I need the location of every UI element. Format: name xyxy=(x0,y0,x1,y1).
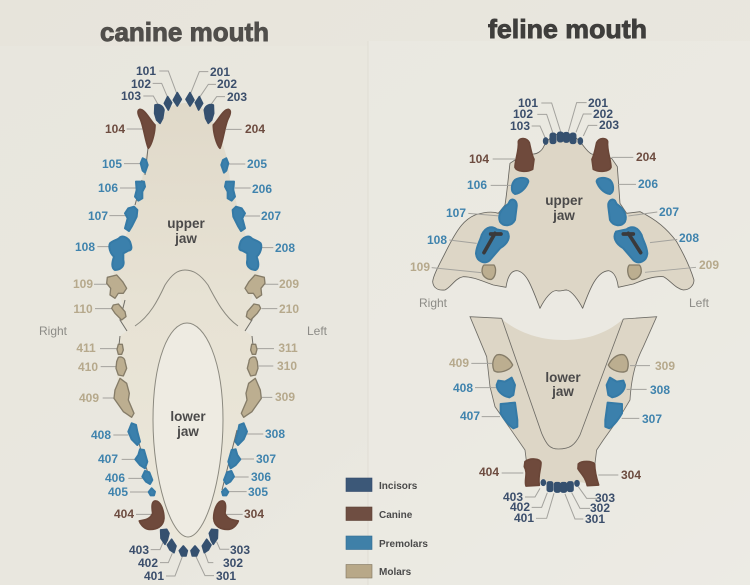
feline upper tooth numbers: 209 xyxy=(699,258,719,272)
canine tooth numbers: 406 xyxy=(105,471,125,485)
canine tooth numbers xyxy=(73,64,299,583)
legend: molars: Molars xyxy=(379,567,412,578)
canine lower teeth xyxy=(100,344,274,576)
canine tooth numbers: 209 xyxy=(279,277,299,291)
feline upper tooth numbers: 108 xyxy=(427,233,447,247)
canine tooth numbers: 108 xyxy=(75,240,95,254)
incisors upper xyxy=(155,93,214,123)
leader lines feline upper xyxy=(432,103,696,273)
feline lower tooth numbers xyxy=(449,356,675,526)
canine tooth numbers: 305 xyxy=(248,485,268,499)
canine tooth numbers: 204 xyxy=(245,122,265,136)
label: canine left side: Left xyxy=(307,324,328,338)
feline lower tooth numbers: 304 xyxy=(621,468,641,482)
molars upper xyxy=(107,275,265,320)
feline upper tooth numbers xyxy=(410,96,719,274)
feline upper tooth numbers: 104 xyxy=(469,152,489,166)
label: canine lower jaw: lower xyxy=(170,409,206,424)
legend xyxy=(346,478,428,578)
canine tooth numbers: 404 xyxy=(114,507,134,521)
feline upper incisors xyxy=(544,132,582,144)
canine tooth numbers: 402 xyxy=(138,556,158,570)
premolars upper xyxy=(109,158,261,270)
feline lower tooth numbers: 401 xyxy=(514,511,534,525)
feline upper tooth numbers: 202 xyxy=(593,107,613,121)
canine tooth numbers: 408 xyxy=(91,428,111,442)
label: canine right side: Right xyxy=(39,324,68,338)
canine tooth numbers: 102 xyxy=(131,77,151,91)
canine tooth numbers: 105 xyxy=(102,157,122,171)
feline lower tooth numbers: 307 xyxy=(642,412,662,426)
premolars lower xyxy=(128,423,247,495)
feline upper jaw shape xyxy=(433,133,694,308)
canine tooth numbers: 409 xyxy=(79,391,99,405)
leader lines lower xyxy=(100,349,274,576)
feline upper tooth numbers: 101 xyxy=(518,96,538,110)
feline lower tooth numbers: 301 xyxy=(585,512,605,526)
canine tooth numbers: 107 xyxy=(88,209,108,223)
label: canine lower jaw: jaw xyxy=(176,424,199,439)
canine tooth numbers: 307 xyxy=(256,452,276,466)
canine tooth numbers: 407 xyxy=(98,452,118,466)
canine tooth numbers: 202 xyxy=(217,77,237,91)
canine tooth numbers: 207 xyxy=(261,209,281,223)
canine tooth numbers: 303 xyxy=(230,543,250,557)
feline lower tooth numbers: 309 xyxy=(655,359,675,373)
canine tooth numbers: 310 xyxy=(277,359,297,373)
feline lower tooth numbers: 402 xyxy=(510,500,530,514)
canine tooth numbers: 306 xyxy=(251,470,271,484)
canine tooth numbers: 410 xyxy=(78,360,98,374)
feline lower tooth numbers: 407 xyxy=(460,409,480,423)
canine jaw shape xyxy=(113,103,259,549)
canine palate arch xyxy=(135,270,238,326)
canine tooth numbers: 203 xyxy=(227,90,247,104)
label: feline lower jaw: jaw xyxy=(551,384,574,399)
label: feline lower jaw: lower xyxy=(545,370,581,385)
canine tooth numbers: 205 xyxy=(247,157,267,171)
feline lower tooth numbers: 408 xyxy=(453,381,473,395)
canine jaw edge lines xyxy=(119,148,254,490)
canine tooth numbers: 206 xyxy=(252,182,272,196)
leader lines upper xyxy=(94,71,278,309)
label: canine upper jaw: upper xyxy=(167,216,205,231)
canine tooth numbers: 401 xyxy=(144,569,164,583)
feline upper tooth numbers: 107 xyxy=(446,206,466,220)
canine tooth numbers: 101 xyxy=(136,64,156,78)
label: canine upper jaw: jaw xyxy=(174,231,197,246)
feline upper tooth numbers: 206 xyxy=(638,177,658,191)
canine upper teeth xyxy=(94,71,278,320)
canine tooth numbers: 106 xyxy=(98,181,118,195)
feline upper molars xyxy=(482,265,641,279)
canine tooth numbers: 208 xyxy=(275,241,295,255)
molars lower xyxy=(114,344,261,417)
canine lower jaw inner oval xyxy=(153,323,223,537)
canine tooth numbers: 109 xyxy=(73,277,93,291)
feline upper tooth numbers: 201 xyxy=(588,96,608,110)
legend: incisors: Incisors xyxy=(379,481,418,492)
leader lines feline lower xyxy=(471,363,650,519)
title: canine mouth: canine mouth xyxy=(100,17,269,47)
label: feline right side: Right xyxy=(419,296,448,310)
feline upper premolars xyxy=(476,178,647,262)
incisors lower xyxy=(161,529,218,556)
feline lower tooth numbers: 403 xyxy=(503,490,523,504)
canines lower xyxy=(139,501,238,529)
feline lower canines xyxy=(524,459,599,486)
feline upper tooth numbers: 109 xyxy=(410,260,430,274)
legend: premolars: Premolars xyxy=(379,539,428,550)
title: feline mouth: feline mouth xyxy=(488,14,647,44)
canine tooth numbers: 301 xyxy=(216,569,236,583)
feline lower jaw shape xyxy=(470,317,657,487)
feline lower tooth numbers: 302 xyxy=(590,501,610,515)
panel: feline lower jaw xyxy=(470,317,657,519)
feline upper tooth numbers: 203 xyxy=(599,118,619,132)
panel: feline upper jaw xyxy=(432,103,696,308)
feline lower jaw outline xyxy=(470,317,657,463)
feline lower molars xyxy=(493,355,628,372)
canine tooth numbers: 411 xyxy=(76,341,96,355)
feline upper tooth numbers: 103 xyxy=(510,119,530,133)
canine tooth numbers: 304 xyxy=(244,507,264,521)
feline upper tooth numbers: 207 xyxy=(659,205,679,219)
panel: canine mouth diagram xyxy=(39,64,328,583)
canines upper xyxy=(138,109,230,148)
feline upper tooth numbers: 102 xyxy=(513,107,533,121)
feline lower premolars xyxy=(497,378,625,428)
label: feline upper jaw: upper xyxy=(545,193,583,208)
feline upper tooth numbers: 106 xyxy=(467,178,487,192)
canine tooth numbers: 311 xyxy=(278,341,298,355)
canine tooth numbers: 302 xyxy=(223,556,243,570)
canine tooth numbers: 403 xyxy=(129,543,149,557)
label: feline upper jaw: jaw xyxy=(552,208,575,223)
feline upper premolar roots xyxy=(484,233,641,253)
feline upper tooth numbers: 208 xyxy=(679,231,699,245)
canine tooth numbers: 201 xyxy=(210,65,230,79)
label: feline left side: Left xyxy=(689,296,710,310)
canine tooth numbers: 104 xyxy=(105,122,125,136)
feline lower tooth numbers: 409 xyxy=(449,356,469,370)
feline lower tooth numbers: 303 xyxy=(595,491,615,505)
feline lower incisors xyxy=(541,480,579,492)
feline lower tooth numbers: 404 xyxy=(479,465,499,479)
canine tooth numbers: 308 xyxy=(265,427,285,441)
canine tooth numbers: 405 xyxy=(108,485,128,499)
canine tooth numbers: 210 xyxy=(279,302,299,316)
feline upper tooth numbers: 204 xyxy=(636,150,656,164)
canine tooth numbers: 309 xyxy=(275,390,295,404)
legend: canine: Canine xyxy=(379,510,413,521)
canine tooth numbers: 103 xyxy=(121,89,141,103)
feline lower tooth numbers: 308 xyxy=(650,383,670,397)
canine tooth numbers: 110 xyxy=(73,302,93,316)
feline upper canines xyxy=(515,139,611,171)
